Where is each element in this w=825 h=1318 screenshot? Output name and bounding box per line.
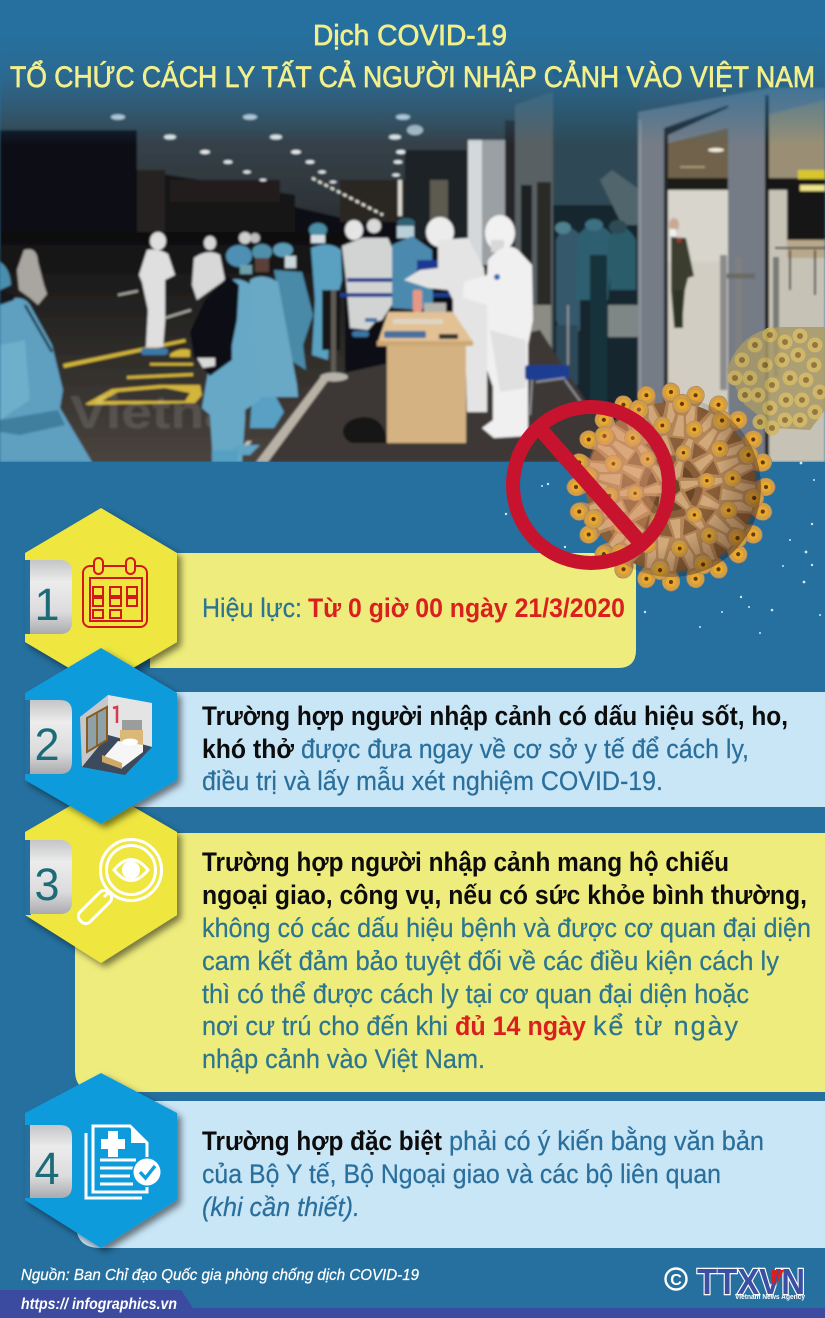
bottle [413, 290, 422, 312]
title: Dịch COVID-19 [313, 20, 507, 52]
road [0, 232, 345, 462]
panel 2 text: được đưa ngay về cơ sở y tế để cách ly, [301, 734, 749, 764]
left front blue gown [0, 262, 92, 462]
sidewalk floor [258, 330, 625, 462]
reflected people in glass [554, 120, 642, 416]
panel 2 text: điều trị và lấy mẫu xét nghiệm COVID-19. [202, 765, 663, 796]
virus [566, 382, 776, 592]
second ring of spikes [577, 393, 765, 581]
panel 3 text: cam kết đảm bảo tuyệt đối về các điều kiện cách ly [202, 946, 779, 976]
panel 4 text [202, 1125, 764, 1222]
panel 4 text: của Bộ Y tế, Bộ Ngoại giao và các bộ liên quan [202, 1159, 721, 1189]
right door interior [767, 188, 825, 462]
inner spikes [626, 442, 716, 532]
door handles [720, 255, 727, 390]
outer spikes [566, 382, 776, 592]
tab with number 3 [30, 840, 72, 914]
person with backpack and other blue gowns [190, 243, 313, 462]
title [10, 20, 815, 94]
panel 3 [75, 833, 825, 1092]
panel 3 text: đủ 14 ngày [455, 1011, 586, 1041]
top gradient overlay [0, 0, 825, 145]
blue staff member [392, 218, 447, 310]
icon: hospital room [80, 695, 152, 775]
bag on floor [343, 417, 387, 443]
white group in back [342, 219, 398, 337]
website: https:// infographics.vn [21, 1296, 177, 1313]
tab with number 1: 1 [34, 579, 60, 630]
door frames [638, 88, 825, 462]
stool [525, 305, 583, 415]
tab with number 4 [30, 1125, 72, 1198]
panel 1 text: Hiệu lực: [202, 593, 302, 623]
panel 3 text: nhập cảnh vào Việt Nam. [202, 1044, 485, 1074]
footer bar [0, 1290, 825, 1318]
icon: medical document [86, 1126, 162, 1198]
column and walls [405, 150, 470, 240]
photo: airport quarantine check [0, 58, 825, 462]
blue woman and stanchion [309, 223, 348, 382]
tagline: Vietnam News Agency [735, 1294, 805, 1301]
panel 4 text: phải có ý kiến bằng văn bản [449, 1125, 764, 1156]
white suit staff [404, 215, 533, 438]
tab with number 4: 4 [34, 1143, 60, 1194]
source line: Nguồn: Ban Chỉ đạo Quốc gia phòng chống dịch COVID-19 [21, 1267, 419, 1284]
panel 2 text [202, 701, 788, 796]
tab with number 2: 2 [34, 719, 60, 770]
panel 1 [150, 553, 636, 668]
hexagon 3 [25, 788, 177, 963]
panel 3 text: Trường hợp người nhập cảnh mang hộ chiếu [202, 847, 729, 877]
TTXVN logo [666, 1261, 805, 1302]
panel 4 [76, 1101, 825, 1248]
panel 2 [120, 692, 825, 807]
hexagon 4 [25, 1073, 177, 1248]
icon: calendar [83, 558, 147, 627]
panel 2 text: khó thở [202, 734, 295, 764]
tab with number 3: 3 [34, 859, 60, 910]
wordmark: TTXVN [697, 1261, 805, 1302]
ceiling [0, 54, 825, 218]
panel 3 text: thì có thể được cách ly tại cơ quan đại diện hoặc [202, 979, 749, 1009]
prohibition sign [513, 407, 669, 563]
left door interior [666, 188, 730, 264]
white suit figures on road [139, 232, 260, 355]
red mark [771, 1270, 784, 1286]
panel 3 text: nơi cư trú cho đến khi [202, 1011, 448, 1041]
belts [340, 280, 457, 295]
second virus, faded, top right [727, 327, 825, 436]
hexagon 2 [25, 648, 177, 824]
copyright mark: C [670, 1272, 682, 1289]
watermark: Vietna [70, 386, 235, 438]
panel 3 text: kể từ ngày [593, 1011, 738, 1041]
specks on blue background [505, 462, 821, 634]
soldier [669, 218, 694, 328]
panel 4 text: (khi cần thiết). [202, 1192, 360, 1222]
table [377, 303, 474, 443]
icon: magnifier with eye [76, 840, 162, 926]
ceiling lights [111, 114, 423, 183]
panel 4 text: Trường hợp đặc biệt [202, 1126, 442, 1156]
panel 1 text: Từ 0 giờ 00 ngày 21/3/2020 [308, 593, 625, 623]
tab with number 2 [30, 700, 72, 774]
yellow road markings [63, 339, 202, 405]
glass reflection wall [553, 72, 638, 423]
tab with number 1 [30, 560, 72, 634]
hexagon 1 [25, 508, 177, 687]
far white figure [17, 249, 47, 305]
middle spikes [599, 415, 743, 559]
panel 3 text [202, 847, 811, 1074]
